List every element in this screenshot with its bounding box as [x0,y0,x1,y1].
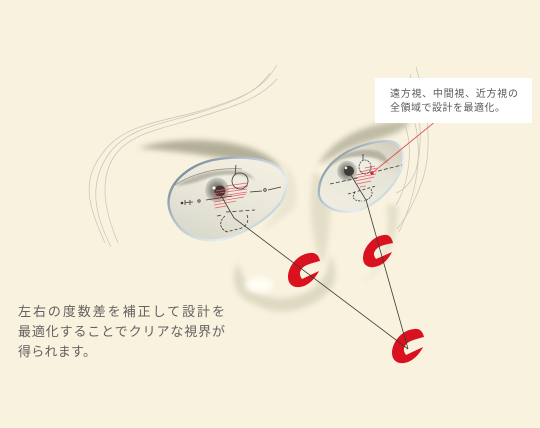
callout box: 遠方視、中間視、近方視の [390,87,518,100]
description text [18,304,225,359]
eye [328,150,388,183]
callout box [375,78,532,123]
C target: near [288,253,320,287]
lens markings [330,154,402,201]
callout dot [370,171,374,175]
description text: 最適化することでクリアな視界が [18,324,225,339]
sight lines [219,172,408,349]
C target: far [392,329,424,363]
description text: 得られます。 [18,344,96,359]
callout leader line [372,121,436,173]
hair lines [89,65,428,247]
red zone lines [354,166,377,187]
lens markings [181,165,281,232]
red far/intermediate/near zone lines [212,183,248,208]
C target: intermediate [363,235,393,267]
right lens [319,141,403,212]
lens body [319,141,403,212]
lens body [169,158,286,240]
description text: 左右の度数差を補正して設計を [18,304,225,319]
eye [175,169,255,203]
face shading [138,120,410,312]
callout box: 全領域で設計を最適化。 [390,101,505,114]
left lens [169,158,286,240]
